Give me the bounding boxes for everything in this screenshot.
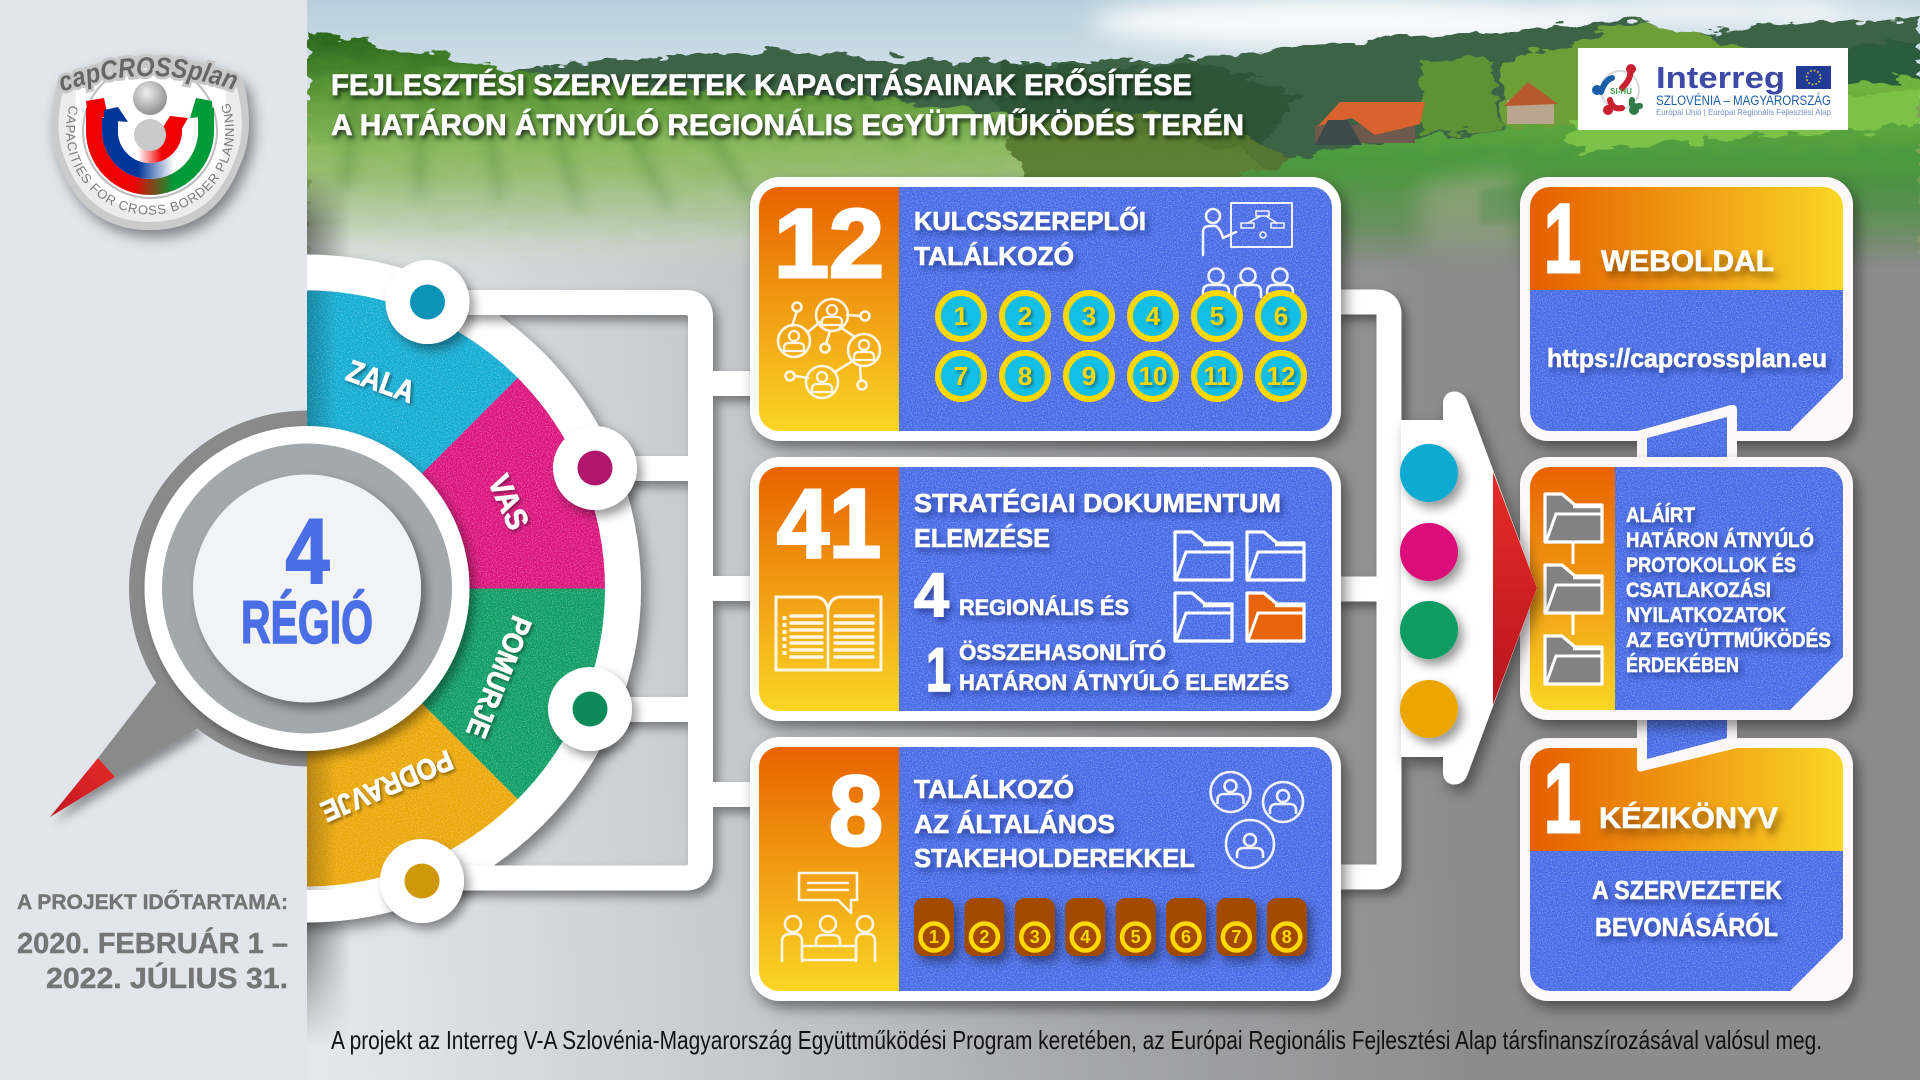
heading: TALÁLKOZÓ	[914, 774, 1074, 804]
text: NYILATKOZATOK	[1626, 604, 1786, 627]
heading and text: ÖSSZEHASONLÍTÓ	[959, 640, 1166, 665]
panel: 1 website: 1	[1544, 184, 1581, 293]
circle numbers: 12	[1266, 361, 1296, 391]
wheel of regions	[307, 254, 655, 938]
heading and text: ELEMZÉSE	[914, 523, 1050, 553]
project duration: A PROJEKT IDŐTARTAMA:	[17, 891, 288, 914]
tab numbers	[929, 927, 1292, 947]
left side panel	[0, 0, 307, 1080]
logo tagline: CAPACITIES FOR CROSS BORDER PLANNING	[66, 104, 234, 215]
circle numbers: 7	[954, 361, 968, 391]
hub dark backing	[129, 410, 307, 766]
project duration: 2020. FEBRUÁR 1 –	[17, 926, 288, 960]
title	[331, 68, 1244, 142]
panel: 8 general stakeholder meetings	[750, 737, 1341, 1001]
right connector bracket	[1335, 302, 1402, 877]
title: FEJLESZTÉSI SZERVEZETEK KAPACITÁSAINAK ERŐSÍTÉSE	[331, 68, 1192, 102]
tab numbers: 2	[979, 927, 989, 947]
region labels: ZALA	[342, 353, 420, 410]
region labels: VAS	[481, 470, 536, 535]
panel: 1 handbook: 1	[1544, 744, 1581, 853]
left connector bracket	[425, 302, 765, 878]
segment: Pomurje	[422, 588, 605, 800]
segment: Vas	[422, 378, 605, 588]
heading and text: 4	[914, 561, 950, 630]
left edge shadow under the side panel	[307, 170, 351, 1050]
heading and text: STRATÉGIAI DOKUMENTUM	[914, 488, 1281, 518]
region labels: POMURJE	[459, 611, 537, 742]
heading: AZ ÁLTALÁNOS	[914, 809, 1115, 839]
farmhouse with orange roof	[1315, 102, 1425, 145]
text: CSATLAKOZÁSI	[1626, 579, 1771, 602]
connector bubble: Pomurje	[548, 667, 632, 751]
connector flag: bottom	[1637, 718, 1737, 772]
tab numbers: 8	[1282, 927, 1292, 947]
wheel edge shade	[307, 290, 337, 890]
panel: 1 website: WEBOLDAL	[1601, 245, 1774, 278]
dot magenta	[1400, 523, 1458, 581]
project duration: 2022. JÚLIUS 31.	[46, 961, 288, 995]
panel: 1 website	[1520, 177, 1853, 441]
segment: Podravje	[307, 704, 518, 886]
circle numbers: 2	[1018, 301, 1032, 331]
Interreg logo: Interreg	[1656, 60, 1785, 95]
connector flag: top	[1637, 405, 1737, 460]
icon: presenter at board	[1203, 203, 1292, 255]
icon: network of people	[778, 299, 880, 398]
circle numbers: 4	[1146, 301, 1161, 331]
tab circles	[920, 924, 1300, 950]
circle numbers	[954, 301, 1296, 391]
segment: Zala	[307, 290, 518, 474]
heading and text: HATÁRON ÁTNYÚLÓ ELEMZÉS	[959, 670, 1289, 695]
heading	[914, 206, 1146, 271]
circle numbers: 1	[954, 301, 968, 331]
dot green	[1400, 601, 1458, 659]
tab numbers: 5	[1131, 927, 1141, 947]
text: AZ EGYÜTTMŰKÖDÉS	[1626, 629, 1831, 652]
panel: 1 handbook: KÉZIKÖNYV	[1599, 801, 1778, 835]
text: PROTOKOLLOK ÉS	[1626, 554, 1796, 577]
icon: audience	[1203, 268, 1293, 297]
tab numbers: 4	[1080, 927, 1090, 947]
icons: three users	[1210, 772, 1303, 868]
dot cyan	[1400, 444, 1458, 502]
hub: 4 regions	[144, 426, 470, 751]
second farmhouse	[1504, 82, 1558, 124]
heading and text: REGIONÁLIS ÉS	[959, 595, 1129, 620]
SI-HU emblem: SI-HU	[1610, 87, 1632, 96]
tab numbers: 6	[1181, 927, 1191, 947]
numbered circles 1–12	[938, 293, 1304, 399]
logo wordmark: capCROSSplan	[58, 54, 240, 94]
SI-HU emblem	[1592, 64, 1640, 115]
region labels: PODRAVJE	[316, 743, 457, 827]
central arrow with region dots	[1400, 391, 1537, 785]
panel: 1 handbook: A SZERVEZETEK	[1592, 875, 1782, 905]
folded corner	[1790, 938, 1846, 991]
arrow red tip	[1493, 472, 1537, 705]
heading and text: 1	[926, 636, 951, 705]
region labels	[316, 353, 537, 827]
tab numbers: 7	[1231, 927, 1241, 947]
brown tabs with numbers 1–8	[914, 898, 1307, 956]
magnifier pointer	[50, 683, 198, 817]
icons: folders	[1175, 532, 1304, 641]
panel: 1 website: https://capcrossplan.eu	[1547, 343, 1827, 373]
connector bubble: Vas	[553, 426, 637, 510]
panel: 41 strategic documents	[750, 457, 1341, 721]
circle numbers: 6	[1274, 301, 1288, 331]
circle numbers: 8	[1018, 361, 1032, 391]
text: ÉRDEKÉBEN	[1626, 654, 1739, 677]
connector bubble: Zala	[386, 260, 470, 344]
icon: meeting with speech bubble	[782, 873, 875, 961]
heading and text	[914, 488, 1289, 705]
panel: 12 key-stakeholder meetings	[750, 177, 1341, 441]
heading	[914, 774, 1195, 873]
Interreg logo: Európai Unió | Európai Regionális Fejlesztési Alap	[1656, 107, 1831, 117]
text	[1626, 504, 1831, 677]
panel: 12 key-stakeholder meetings: 12	[774, 189, 884, 298]
panel: 1 handbook: BEVONÁSÁRÓL	[1595, 912, 1778, 942]
text: ALÁÍRT	[1626, 504, 1695, 527]
connector bubble: Podravje	[380, 839, 464, 923]
icon: open book	[776, 597, 881, 670]
panel: 8 general stakeholder meetings: 8	[829, 755, 883, 866]
hub: 4 regions: RÉGIÓ	[241, 589, 373, 656]
wheel white ring	[307, 254, 655, 938]
icons: linked grey folders	[1545, 494, 1602, 684]
heading: KULCSSZEREPLŐI	[914, 206, 1146, 236]
landscape photo band	[307, 0, 1920, 280]
Interreg logo	[1578, 48, 1848, 130]
EU flag	[1796, 66, 1831, 89]
Interreg logo: SZLOVÉNIA – MAGYARORSZÁG	[1656, 93, 1831, 108]
folded corner	[1790, 378, 1846, 431]
tab numbers: 3	[1030, 927, 1040, 947]
text: HATÁRON ÁTNYÚLÓ	[1626, 528, 1814, 552]
panel: signed protocols	[1520, 457, 1853, 720]
circle numbers: 3	[1082, 301, 1096, 331]
circle numbers: 9	[1082, 361, 1096, 391]
folded corner	[1790, 657, 1846, 710]
tab numbers: 1	[929, 927, 939, 947]
dot amber	[1400, 680, 1458, 738]
logo sphere	[133, 81, 167, 115]
title: A HATÁRON ÁTNYÚLÓ REGIONÁLIS EGYÜTTMŰKÖDÉS TERÉN	[331, 108, 1244, 142]
hub: 4 regions: 4	[286, 501, 330, 603]
panel: 41 strategic documents: 41	[777, 469, 881, 578]
circle numbers: 11	[1204, 361, 1230, 391]
panel: 1 handbook	[1520, 738, 1853, 1001]
circle numbers: 10	[1138, 361, 1168, 391]
circle numbers: 5	[1210, 301, 1224, 331]
heading: TALÁLKOZÓ	[914, 241, 1074, 271]
heading: STAKEHOLDEREKKEL	[914, 843, 1195, 873]
logo: capCROSSplan	[48, 53, 263, 246]
project duration	[17, 891, 288, 995]
